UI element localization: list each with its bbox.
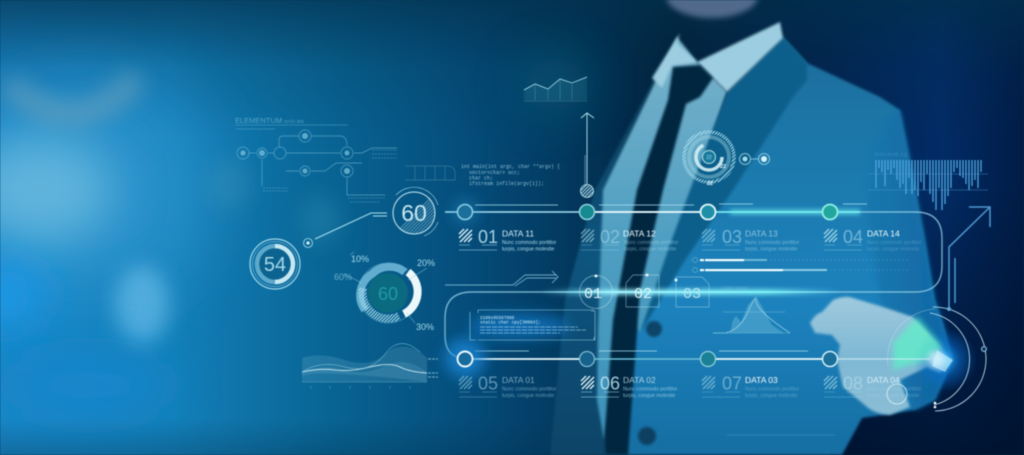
step 04 <box>824 227 922 252</box>
donut chart with percent labels: 10% <box>351 254 369 264</box>
step 01: Nunc commodo porttitor <box>502 240 557 246</box>
code snippet: vector<char> acc; <box>469 170 520 176</box>
face and neck <box>666 0 758 18</box>
pocket line <box>727 434 835 436</box>
step 06: 06 <box>600 374 620 394</box>
step 01 <box>459 227 557 252</box>
step 08: turpis, congue molestie <box>867 393 920 399</box>
glow behind fingertip <box>893 317 977 392</box>
main coat <box>605 37 953 455</box>
numbered badges 01 02 03: 02 <box>634 286 652 303</box>
step 08 <box>824 374 922 399</box>
step 02: Nunc commodo porttitor <box>624 240 679 246</box>
bar chart, top right <box>868 152 988 210</box>
step 05: Nunc commodo porttitor <box>502 386 557 392</box>
track nodes <box>445 199 838 378</box>
concentric target gauge: 22 <box>707 181 713 187</box>
man in suit <box>550 0 953 455</box>
fingertip HUD rings <box>887 307 986 411</box>
step 03: 03 <box>722 227 742 247</box>
arrow line above code panel <box>445 271 558 286</box>
step 06: DATA 02 <box>623 375 656 385</box>
gauge 60: 60 <box>401 200 427 226</box>
step 02 <box>581 227 679 252</box>
jacket buttons <box>638 321 662 445</box>
donut chart with percent labels: 20% <box>417 258 435 268</box>
step 03: DATA 13 <box>745 228 778 238</box>
step 07: DATA 03 <box>745 375 778 385</box>
step 07: turpis, congue molestie <box>745 393 798 399</box>
gauge 54: 54 <box>264 254 286 276</box>
code panel: 2188x95567988 <box>480 316 515 321</box>
flow diagram <box>235 116 397 202</box>
step 05: DATA 01 <box>502 375 535 385</box>
bell curve chart <box>713 286 790 333</box>
step 05: 05 <box>478 374 498 394</box>
code snippet: char ch; <box>469 176 493 182</box>
step 03 <box>702 227 800 252</box>
top right diagonal arrow <box>949 207 990 310</box>
step 02: 02 <box>600 227 620 247</box>
step 06: turpis, congue molestie <box>623 393 676 399</box>
code snippet <box>405 164 560 187</box>
step 02 title: DATA 12 <box>623 228 656 238</box>
step 04: Nunc commodo porttitor <box>867 240 922 246</box>
step 08: DATA 04 <box>867 375 900 385</box>
gauge 60 <box>393 187 438 236</box>
necktie <box>605 65 713 455</box>
code snippet: int main(int argc, char **argv) { <box>461 164 560 170</box>
concentric target gauge: 22 <box>720 164 726 170</box>
area chart <box>302 343 438 389</box>
donut chart with percent labels: 60% <box>334 272 352 282</box>
shirt collar <box>652 22 783 92</box>
step 04: DATA 14 <box>867 228 900 238</box>
progress bars <box>692 258 910 272</box>
numbered badges 01 02 03 <box>580 274 709 308</box>
shirt <box>597 37 727 440</box>
hand <box>810 297 953 415</box>
step 03: Nunc commodo porttitor <box>745 240 800 246</box>
code panel <box>470 310 595 340</box>
code panel: static char cpy[30084]; <box>480 320 541 326</box>
numbered badges 01 02 03: 03 <box>683 286 701 303</box>
bar chart, top right: DATA RATE 2.5 <box>875 152 907 157</box>
step 05: turpis, congue molestie <box>502 393 555 399</box>
gauge 54 <box>250 239 300 289</box>
step 06: Nunc commodo porttitor <box>623 386 678 392</box>
code snippet: ifstream infile(argv[1]); <box>469 181 544 187</box>
lapel <box>640 37 807 333</box>
step 04: turpis, congue molestie <box>867 246 920 252</box>
network track: rounded circuit <box>445 204 942 359</box>
left side of coat <box>550 45 672 455</box>
step 07 <box>702 374 800 399</box>
step 07: Nunc commodo porttitor <box>745 386 800 392</box>
flow diagram: ELEMENTUM DATA 302 <box>235 116 305 125</box>
step 06 <box>581 374 678 399</box>
upward arrow with hatched circle <box>580 113 594 198</box>
mini line chart <box>524 77 587 101</box>
step 08: 08 <box>843 374 863 394</box>
bell curve chart: Data view <box>721 286 748 292</box>
numbered badges 01 02 03: 01 <box>584 286 602 303</box>
step 05 <box>459 374 557 399</box>
step 08: Nunc commodo porttitor <box>867 386 922 392</box>
concentric target gauge: 22 <box>706 155 712 161</box>
step 01: DATA 11 <box>502 228 534 238</box>
donut chart with percent labels: 30% <box>416 322 434 332</box>
step 04: 04 <box>843 227 863 247</box>
step 01: turpis, congue molestie <box>502 246 555 252</box>
donut chart with percent labels: 60 <box>378 284 398 304</box>
sleeve shading <box>865 110 953 410</box>
concentric target gauge <box>684 132 770 187</box>
connector from gauge 54 to 60 <box>304 213 387 248</box>
step 02: turpis, congue molestie <box>624 246 677 252</box>
donut chart with percent labels <box>334 252 435 332</box>
step 03: turpis, congue molestie <box>745 246 798 252</box>
step 01: 01 <box>478 227 498 247</box>
step 07: 07 <box>722 374 742 394</box>
